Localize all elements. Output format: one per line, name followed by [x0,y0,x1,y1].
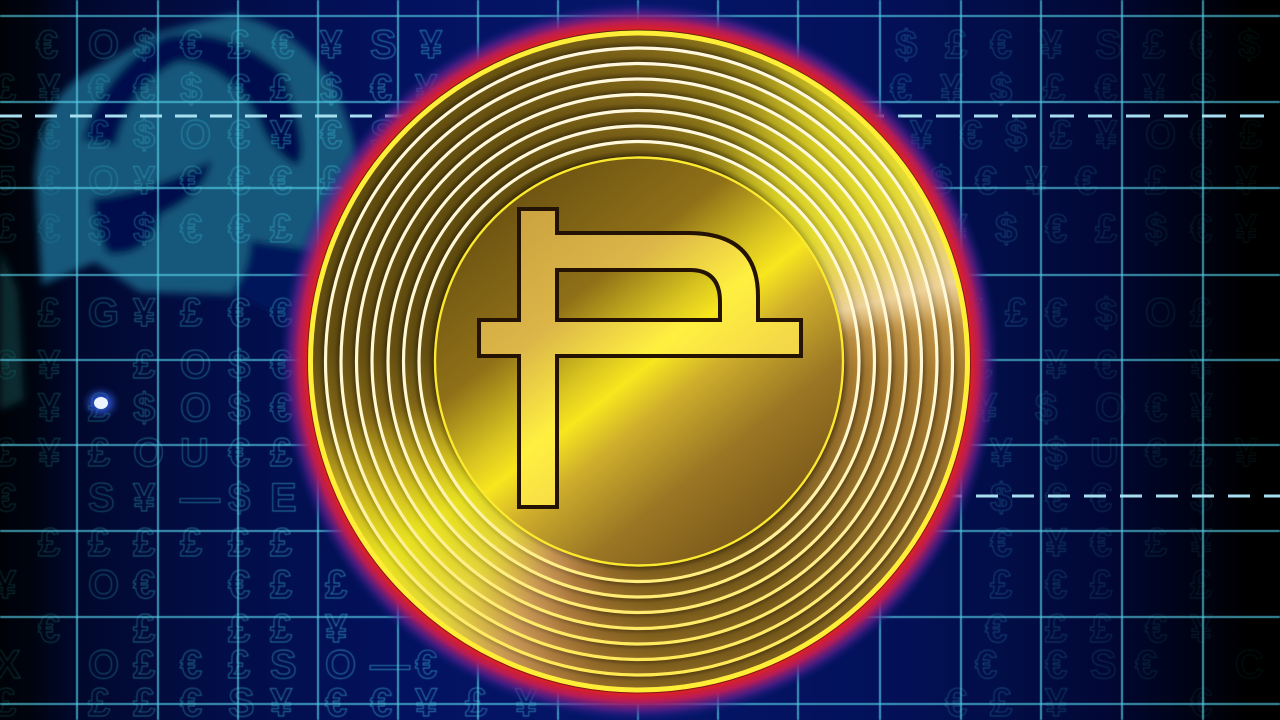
currency symbol field: S€£$O€¥€S¥€$£¥O€£ [0,113,1262,157]
currency symbol field: €S¥—$E$€€$ [0,476,1212,520]
currency symbol field: ¥£$O$€¥$O€¥ [38,386,1213,430]
currency symbol field: €¥£O$€£¥€¥ [0,343,1213,387]
currency symbol field: 5€O¥€€€£$€¥€£$¥ [0,159,1258,203]
band metallic shine [308,30,970,692]
currency symbol field: XO£€£SO—€€€S€C [0,643,1264,687]
currency symbol field: €O$€£€¥S¥$£€¥S£€$ [36,23,1260,67]
currency symbol field: €£££¥€££€¥ [38,607,1213,651]
currency symbol field: £€$$€€£¥$€£$€¥ [0,207,1258,251]
glowing dot [88,392,114,414]
currency symbol field: ££££££€¥€£¥ [38,521,1213,565]
currency symbol field: £¥€€$€£$€¥€¥$£€¥S [0,67,1217,111]
coin glow [279,2,999,720]
currency symbol field: ¥O€€£££€££ [0,563,1212,607]
currency symbol field: £G¥£€€¥£€$O£ [38,291,1212,335]
peso symbol [479,209,801,507]
concentric white rings [326,48,952,675]
inner disc [435,158,843,566]
coin ridged bands [308,30,970,692]
ghost euro symbol [0,14,359,410]
currency symbol field: £¥£OU€£¥$U€£¥ [0,431,1258,475]
dashed scan lines [0,116,1280,496]
band groove shading [308,30,970,692]
outer rim [308,30,970,693]
